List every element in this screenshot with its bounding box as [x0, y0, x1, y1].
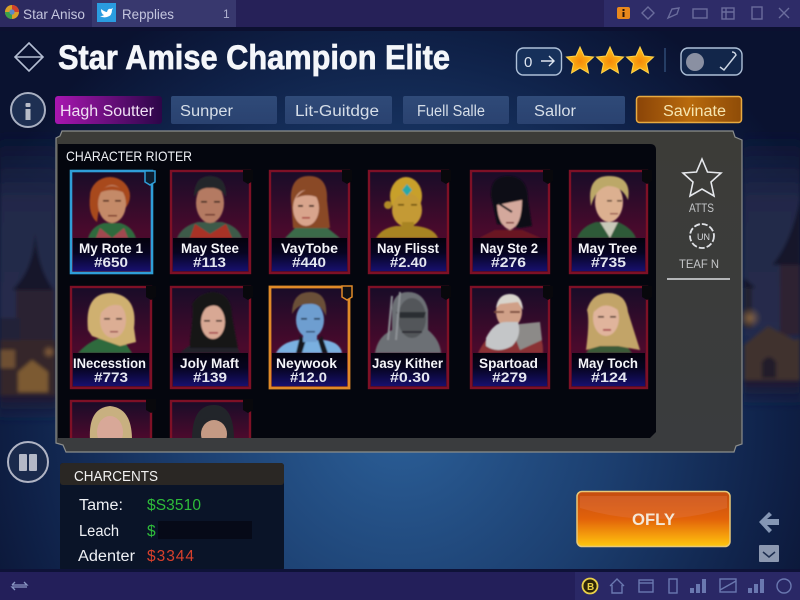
card: May Stee: #113	[193, 255, 227, 270]
card: Nay Flisst: #2.40	[390, 255, 427, 270]
icon: star outline	[683, 159, 721, 196]
card: INecesstion: #773	[94, 370, 129, 385]
card: Nay Flisst: Nay Flisst	[377, 240, 439, 256]
tab: Replies	[92, 0, 236, 27]
row: Leach: $	[147, 523, 156, 540]
label: TEAM N: TEAF N	[679, 257, 719, 271]
row: Tame	[79, 497, 201, 514]
play button	[577, 492, 730, 546]
card: VayTobe: #440	[292, 255, 326, 270]
card: My Rote 1	[71, 171, 155, 273]
sidebar	[667, 159, 730, 280]
portrait: long blonde woman	[586, 293, 640, 353]
portrait: blonde fighter	[78, 293, 136, 353]
portrait: auburn-haired woman	[285, 176, 340, 238]
card: May Tree	[570, 170, 652, 273]
portrait: dark-haired man	[177, 176, 242, 238]
castle silhouette left	[0, 130, 56, 425]
rating stars	[566, 47, 654, 73]
portrait: golden mask figure	[376, 177, 438, 238]
stats heading: CHARCENTS	[74, 468, 158, 485]
card: May Toch: May Toch	[578, 355, 638, 371]
castle silhouette right	[739, 130, 800, 410]
portrait: black-haired woman	[479, 176, 541, 238]
icon: mail	[759, 545, 779, 562]
icon: swap arrows	[12, 582, 27, 590]
tab: Fuell Salle: Fuell Salle	[417, 103, 485, 120]
card: Jasy Kither: Jasy Kither	[372, 355, 444, 371]
roster heading: CHARACTER RIOTER	[66, 148, 192, 164]
icon: pause	[8, 442, 48, 482]
frame panel	[56, 131, 742, 452]
card: May Tree: #735	[591, 255, 627, 270]
panel: character roster	[58, 144, 656, 461]
icon: diamond menu	[15, 43, 43, 71]
tab: Star Aniso	[0, 0, 92, 27]
settings box	[665, 48, 742, 75]
counter box: 0	[524, 54, 532, 71]
card: Spartoad: Spartoad	[479, 355, 538, 371]
icon: info	[11, 93, 45, 127]
card: VayTobe	[270, 170, 352, 273]
top tab bar	[0, 0, 800, 31]
row: Leach: Leach	[79, 523, 119, 540]
icon: coin	[582, 578, 598, 594]
portrait: white-bearded elder	[478, 294, 543, 353]
tab: Sunper	[171, 96, 277, 124]
card: Nay Ste 2	[471, 170, 553, 273]
card: Nay Ste 2: #276	[491, 255, 527, 270]
toolbar icons	[610, 579, 791, 593]
card: May Stee: May Stee	[181, 240, 239, 256]
tab: Star Aniso: Star Aniso	[23, 6, 85, 22]
title: Star Amise Champion Elite	[58, 39, 450, 77]
card: May Tree: May Tree	[578, 240, 637, 256]
card: May Stee	[171, 170, 253, 273]
window controls	[604, 0, 800, 27]
card: Neywook: #12.0	[290, 370, 327, 385]
card: partial blonde character	[70, 400, 152, 438]
tab: Savinate	[636, 96, 742, 122]
card: Joly Maft	[171, 286, 253, 388]
card: partial dark-haired character	[170, 400, 252, 438]
play button: OFLY	[632, 510, 676, 529]
portrait: blue-skinned figure	[276, 292, 342, 353]
card: Joly Maft: Joly Maft	[180, 355, 239, 371]
card: Joly Maft: #139	[193, 370, 227, 385]
icon: back arrow	[759, 512, 779, 533]
card: Spartoad	[471, 286, 553, 388]
row: Leach	[79, 521, 252, 540]
tab: Replies: 1	[223, 7, 230, 21]
tab: Hagh Soutter	[55, 96, 162, 124]
tab: Sunper: Sunper	[180, 103, 233, 120]
tab: Sallor	[517, 96, 625, 124]
navigation tabs	[55, 96, 742, 124]
card: Nay Flisst	[369, 170, 451, 273]
card: Neywook	[270, 286, 352, 388]
icon: coin: B	[587, 582, 594, 593]
card: Jasy Kither	[369, 286, 451, 388]
card: Nay Ste 2: Nay Ste 2	[480, 240, 538, 256]
tab: Sallor: Sallor	[534, 103, 576, 120]
card: Neywook: Neywook	[276, 355, 337, 371]
portrait: grey hooded warrior	[375, 292, 441, 353]
tab: Lit-Guitdge: Lit-Guitdge	[295, 103, 379, 120]
signal bars	[690, 579, 764, 593]
portrait: blond man	[577, 176, 636, 238]
card: My Rote 1: #650	[94, 255, 128, 270]
label: ATTS: ATTS	[689, 203, 714, 215]
card: INecesstion	[71, 286, 156, 388]
row: Tame: $S3510	[147, 497, 201, 514]
row: Adenter	[78, 548, 194, 565]
card: May Toch: #124	[591, 370, 628, 385]
portrait: black-haired woman	[180, 292, 240, 353]
counter box	[516, 48, 562, 75]
tab: Hagh Soutter: Hagh Soutter	[60, 103, 154, 120]
card: INecesstion: INecesstion	[73, 355, 146, 371]
tab: Lit-Guitdge	[285, 96, 392, 124]
card: Spartoad: #279	[492, 370, 527, 385]
card: VayTobe: VayTobe	[281, 240, 338, 256]
tab: Savinate: Savinate	[663, 103, 726, 120]
card: May Toch	[570, 286, 652, 388]
panel: stats	[60, 463, 284, 571]
portrait: red-haired man	[88, 177, 136, 238]
row: Adenter: $3344	[147, 548, 194, 565]
icon: team badge: UN	[697, 232, 710, 242]
row: Tame: Tame:	[79, 497, 123, 514]
tab: Replies: Repplies	[122, 6, 174, 22]
card: Jasy Kither: #0.30	[390, 370, 430, 385]
bottom bar	[0, 569, 800, 600]
row: Adenter: Adenter	[78, 548, 135, 565]
tab: Fuell Salle	[403, 96, 509, 124]
card: My Rote 1: My Rote 1	[79, 240, 143, 256]
